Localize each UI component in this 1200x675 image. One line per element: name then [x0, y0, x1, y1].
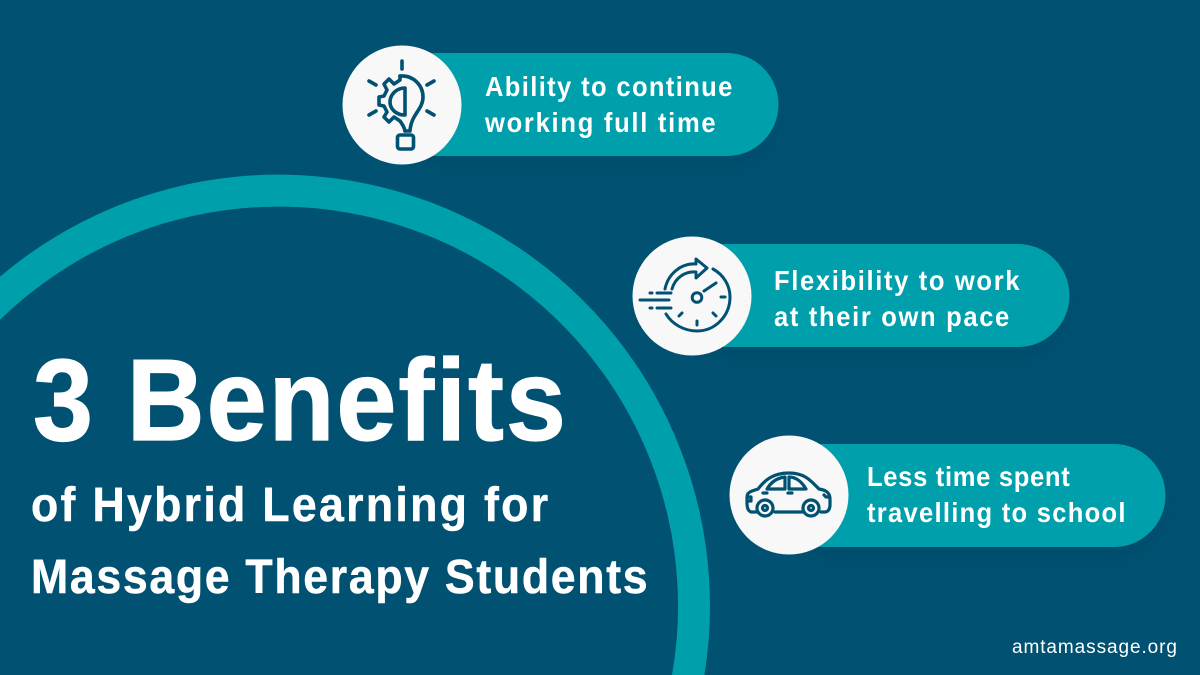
benefit 2 text: at their own pace [774, 301, 1009, 332]
heading: 3 Benefits: 3 Benefits [33, 335, 566, 465]
subheading line 1: of Hybrid Learning for [31, 478, 548, 531]
benefit 1 text: Ability to continue [485, 71, 732, 102]
subheading line 2: Massage Therapy Students [31, 550, 648, 603]
benefit 1 text [484, 71, 732, 138]
title [31, 335, 648, 603]
benefit 2 text [774, 265, 1020, 332]
benefit 2 [632, 236, 1070, 358]
benefit 2 text: Flexibility to work [774, 265, 1020, 296]
benefit 3 [730, 436, 1166, 558]
pill 1 [400, 53, 778, 156]
benefit 1 text: working full time [484, 107, 716, 138]
icon: car [730, 436, 848, 554]
icon: stopwatch with arrow [632, 236, 752, 356]
website credit: amtamassage.org [1012, 637, 1177, 658]
benefit 3 text [867, 461, 1126, 528]
icon: lightbulb with gear [342, 46, 462, 164]
pill 3 [785, 444, 1166, 547]
pill 2 [690, 244, 1070, 347]
decorative ring [0, 175, 710, 675]
benefit 1 [342, 46, 778, 167]
benefit 3 text: travelling to school [867, 497, 1126, 528]
benefit 3 text: Less time spent [867, 461, 1070, 492]
